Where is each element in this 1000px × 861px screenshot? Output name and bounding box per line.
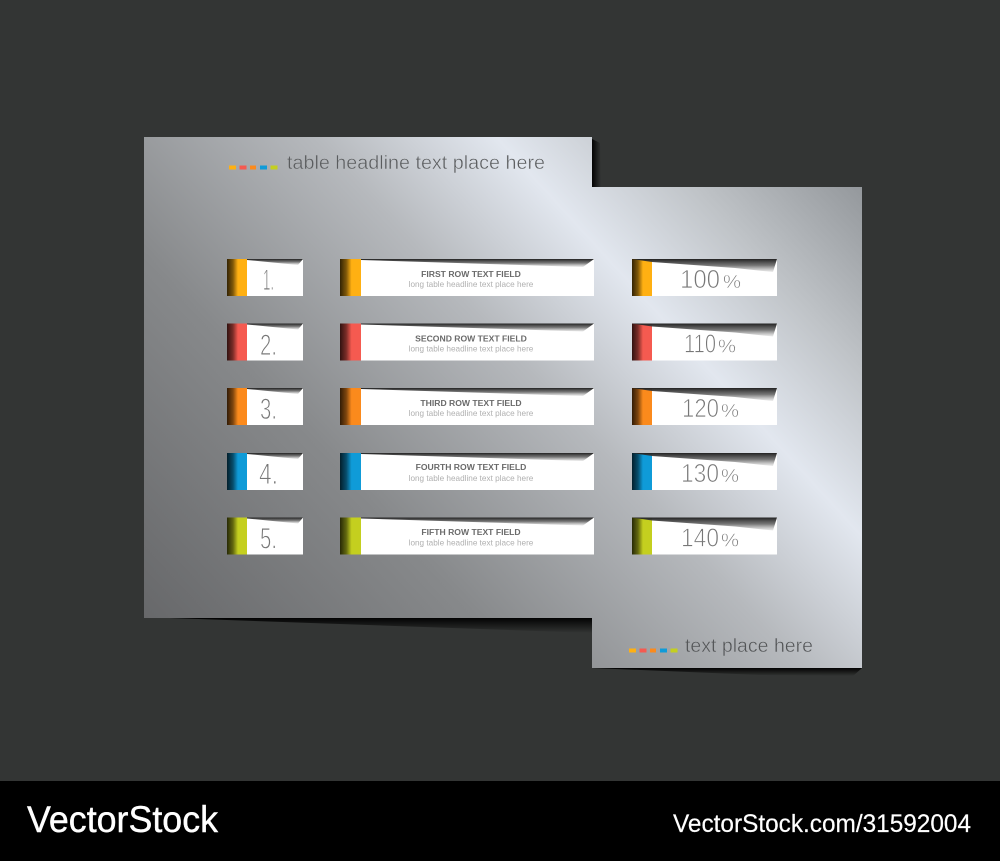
percent cell 2 (632, 324, 777, 360)
row 1 (227, 259, 777, 297)
text cell 2 (340, 324, 594, 360)
footer brand: VectorStock (27, 799, 218, 840)
number cell 1 (227, 259, 303, 297)
text cell 1: long table headline text place here (409, 280, 534, 289)
number cell 3 (227, 388, 303, 426)
row 3 (227, 388, 777, 426)
number cell 2 (227, 324, 303, 362)
footer bar (0, 781, 1000, 861)
text cell 4: long table headline text place here (409, 474, 534, 483)
text cell 5: FIFTH ROW TEXT FIELD (421, 527, 521, 537)
row 2 (227, 324, 777, 362)
percent cell 2: % (718, 336, 736, 356)
text cell 3: long table headline text place here (409, 409, 534, 418)
percent cell 1: 100 (680, 264, 720, 294)
percent cell 5: 140 (681, 522, 719, 552)
percent cell 2: 110 (684, 328, 716, 358)
percent cell 3: % (721, 401, 739, 421)
row 4 (227, 453, 777, 491)
caption colour dashes (629, 648, 678, 652)
text cell 5: long table headline text place here (409, 538, 534, 548)
percent cell 4: 130 (681, 458, 719, 488)
percent cell 3: 120 (682, 393, 719, 423)
number cell 3: 3. (260, 393, 277, 426)
text cell 2: long table headline text place here (409, 344, 534, 354)
footer image id: VectorStock.com/31592004 (673, 810, 971, 838)
number cell 4: 4. (259, 458, 278, 491)
caption text: text place here (685, 636, 813, 657)
panel: metallic stepped sheet (144, 137, 862, 668)
text cell 1: FIRST ROW TEXT FIELD (421, 269, 521, 279)
percent cell 1: % (723, 272, 741, 292)
text cell 2: SECOND ROW TEXT FIELD (415, 334, 527, 344)
text cell 5 (340, 518, 594, 554)
text cell 4: FOURTH ROW TEXT FIELD (416, 462, 526, 472)
percent cell 3 (632, 388, 777, 425)
number cell 5: 5. (260, 522, 277, 556)
text cell 3 (340, 388, 594, 425)
caption: text place here (629, 636, 813, 657)
headline text: table headline text place here (287, 153, 545, 174)
panel shadows (170, 139, 862, 676)
number cell 4 (227, 453, 303, 491)
text cell 1 (340, 259, 594, 296)
percent cell 1 (632, 259, 777, 296)
heading: table headline (229, 153, 545, 174)
row 5 (227, 518, 777, 556)
headline colour dashes (229, 166, 278, 170)
percent cell 5 (632, 518, 777, 554)
text cell 4 (340, 453, 594, 490)
text cell 3: THIRD ROW TEXT FIELD (420, 398, 522, 408)
percent cell 4: % (721, 466, 739, 486)
number cell 2: 2. (260, 329, 277, 362)
percent cell 5: % (721, 530, 739, 550)
number cell 5 (227, 518, 303, 556)
number cell 1: 1. (263, 264, 274, 297)
percent cell 4 (632, 453, 777, 490)
